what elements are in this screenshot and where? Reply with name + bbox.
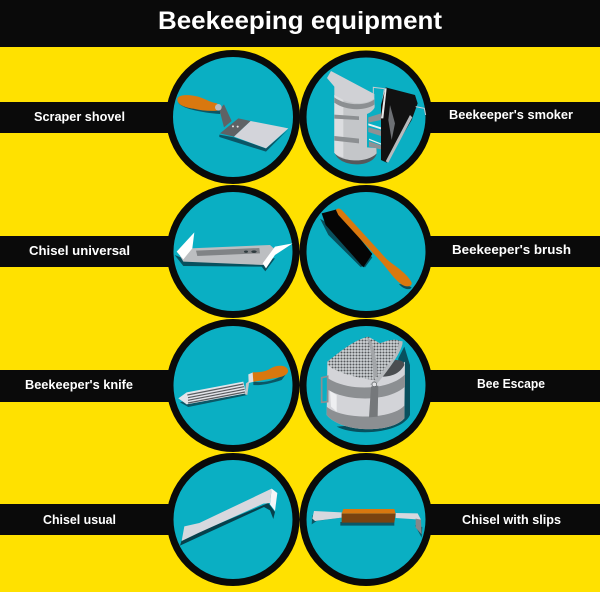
- label bar: chisel universal: Chisel universal: [29, 244, 130, 258]
- icon: scraper shovel: [177, 95, 288, 152]
- panel: bee escape: [303, 322, 600, 448]
- panel: chisel universal: [0, 188, 296, 314]
- icon: chisel usual: [180, 489, 277, 546]
- label bar: scraper shovel: Scraper shovel: [34, 110, 125, 124]
- circle: chisel universal: [170, 188, 296, 314]
- panel: chisel usual: [0, 456, 296, 582]
- panel: chisel with slips: [303, 456, 600, 582]
- label bar: beekeeper's knife: [0, 370, 180, 402]
- panel: beekeeper's brush: [303, 188, 600, 314]
- label bar: beekeeper's knife: Beekeeper's knife: [25, 378, 133, 392]
- title banner: [0, 0, 600, 47]
- label bar: beekeeper's brush: Beekeeper's brush: [452, 243, 571, 257]
- label bar: chisel usual: [0, 504, 180, 535]
- panel: beekeeper's smoker: [303, 54, 600, 180]
- circle: beekeeper's brush: [303, 188, 429, 314]
- label bar: beekeeper's brush: [420, 236, 600, 267]
- circle: chisel with slips: [303, 456, 429, 582]
- label bar: scraper shovel: [0, 102, 180, 133]
- circle: beekeeper's smoker: [303, 54, 429, 180]
- icon: bee escape: [322, 337, 410, 432]
- icon: beekeeper's brush: [320, 209, 412, 289]
- circle: bee escape: [303, 322, 429, 448]
- circle: beekeeper's knife: [170, 322, 296, 448]
- circle: scraper shovel: [170, 54, 296, 180]
- title banner: Beekeeping equipment: [158, 7, 443, 35]
- icon: beekeeper's smoker: [327, 71, 426, 164]
- icon: chisel with slips: [312, 509, 422, 538]
- icon: beekeeper's knife: [178, 366, 288, 407]
- label bar: chisel universal: [0, 236, 180, 267]
- icon: chisel universal: [175, 232, 293, 271]
- panel: beekeeper's knife: [0, 322, 296, 448]
- label bar: chisel with slips: [420, 504, 600, 535]
- panel: scraper shovel: [0, 54, 296, 180]
- label bar: bee escape: Bee Escape: [477, 377, 545, 391]
- label bar: beekeeper's smoker: Beekeeper's smoker: [449, 108, 573, 122]
- label bar: bee escape: [420, 370, 600, 402]
- label bar: chisel with slips: Chisel with slips: [462, 513, 561, 527]
- circle: chisel usual: [170, 456, 296, 582]
- label bar: chisel usual: Chisel usual: [43, 513, 116, 527]
- label bar: beekeeper's smoker: [420, 102, 600, 133]
